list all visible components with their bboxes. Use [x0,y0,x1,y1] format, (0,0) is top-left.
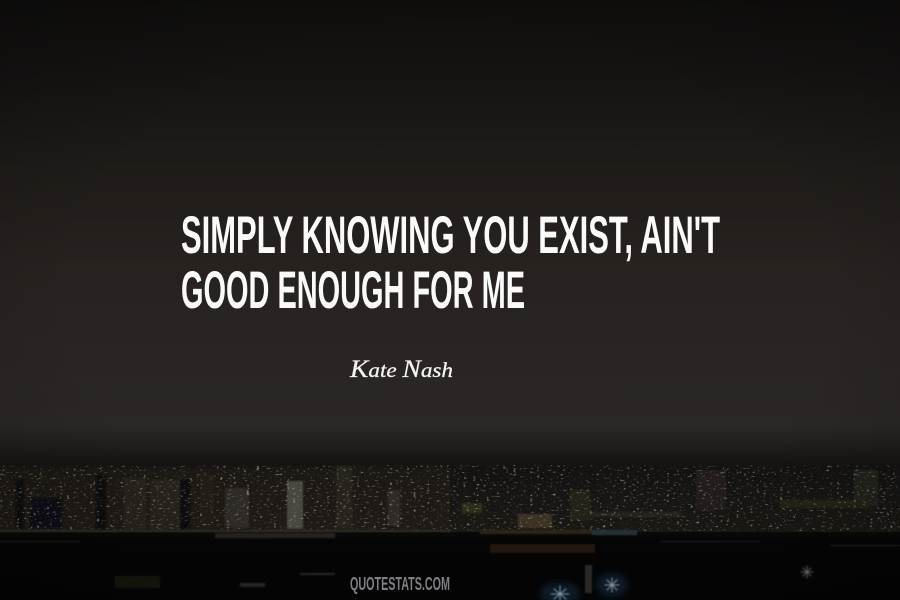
icon: starburst lights [551,566,813,600]
city lights texture [0,465,900,531]
quote text [181,206,720,320]
watermark: QUOTESTATS.COM [350,574,450,594]
foreground lights [115,576,160,588]
city skyline [0,462,900,600]
quote text: GOOD ENOUGH FOR ME [181,261,525,320]
riverside road [0,530,900,593]
author name: Kate Nash [349,356,453,383]
